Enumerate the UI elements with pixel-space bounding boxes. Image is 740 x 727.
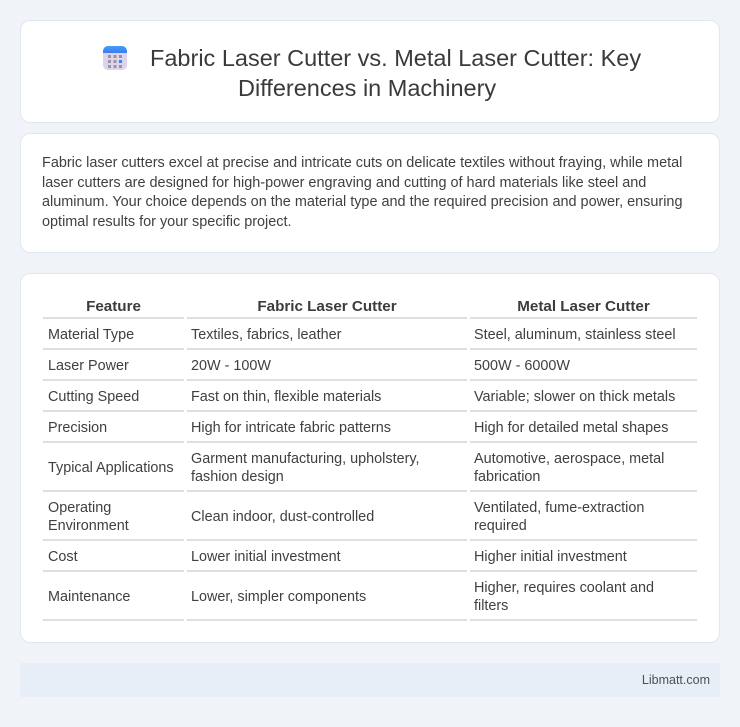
comparison table: Environment xyxy=(48,518,129,534)
table header: Metal Laser Cutter xyxy=(517,298,650,314)
comparison table: Automotive, aerospace, metal xyxy=(474,451,664,467)
title: Fabric Laser Cutter vs. Metal Laser Cutter: Key xyxy=(150,45,641,71)
comparison table: High for intricate fabric patterns xyxy=(191,420,391,436)
title xyxy=(150,45,641,101)
intro text: laser cutters are designed for high-power engraving and cutting of hard materials like steel and xyxy=(42,175,646,191)
comparison table: Higher, requires coolant and xyxy=(474,580,654,596)
comparison table: Material Type xyxy=(48,327,134,343)
comparison table: Laser Power xyxy=(48,358,129,374)
comparison table: Typical Applications xyxy=(48,460,174,476)
intro panel xyxy=(20,133,720,253)
comparison table: fabrication xyxy=(474,469,540,485)
table header: Feature xyxy=(86,298,141,314)
comparison table: Operating xyxy=(48,500,111,516)
intro text: aluminum. Your choice depends on the material type and the required precision and power, ensuring xyxy=(42,194,682,210)
comparison table: Cutting Speed xyxy=(48,389,139,405)
comparison table: Lower initial investment xyxy=(191,549,341,565)
comparison table: High for detailed metal shapes xyxy=(474,420,668,436)
intro text: optimal results for your specific project. xyxy=(42,214,292,230)
comparison table: Ventilated, fume-extraction xyxy=(474,500,644,516)
comparison table: filters xyxy=(474,598,508,614)
comparison table: Variable; slower on thick metals xyxy=(474,389,675,405)
table panel xyxy=(20,273,720,643)
comparison table: 20W - 100W xyxy=(191,358,271,374)
comparison table: Fast on thin, flexible materials xyxy=(191,389,381,405)
comparison table: Higher initial investment xyxy=(474,549,627,565)
comparison table: Clean indoor, dust-controlled xyxy=(191,509,374,525)
intro text: Fabric laser cutters excel at precise and intricate cuts on delicate textiles without fraying, while metal xyxy=(42,155,682,171)
comparison table: Garment manufacturing, upholstery, xyxy=(191,451,420,467)
table header: Fabric Laser Cutter xyxy=(257,298,397,314)
intro text xyxy=(42,155,682,230)
comparison table: Lower, simpler components xyxy=(191,589,366,605)
footer xyxy=(20,663,720,697)
title: Differences in Machinery xyxy=(238,75,496,101)
comparison table: Textiles, fabrics, leather xyxy=(191,327,341,343)
comparison table: required xyxy=(474,518,527,534)
comparison table: Steel, aluminum, stainless steel xyxy=(474,327,676,343)
comparison table: Precision xyxy=(48,420,107,436)
comparison table: fashion design xyxy=(191,469,284,485)
footer: Libmatt.com xyxy=(642,673,710,687)
icon: calendar xyxy=(103,46,127,70)
header panel xyxy=(20,20,720,123)
comparison table: Maintenance xyxy=(48,589,130,605)
comparison table: 500W - 6000W xyxy=(474,358,570,374)
table header xyxy=(86,298,650,314)
comparison table: Cost xyxy=(48,549,78,565)
